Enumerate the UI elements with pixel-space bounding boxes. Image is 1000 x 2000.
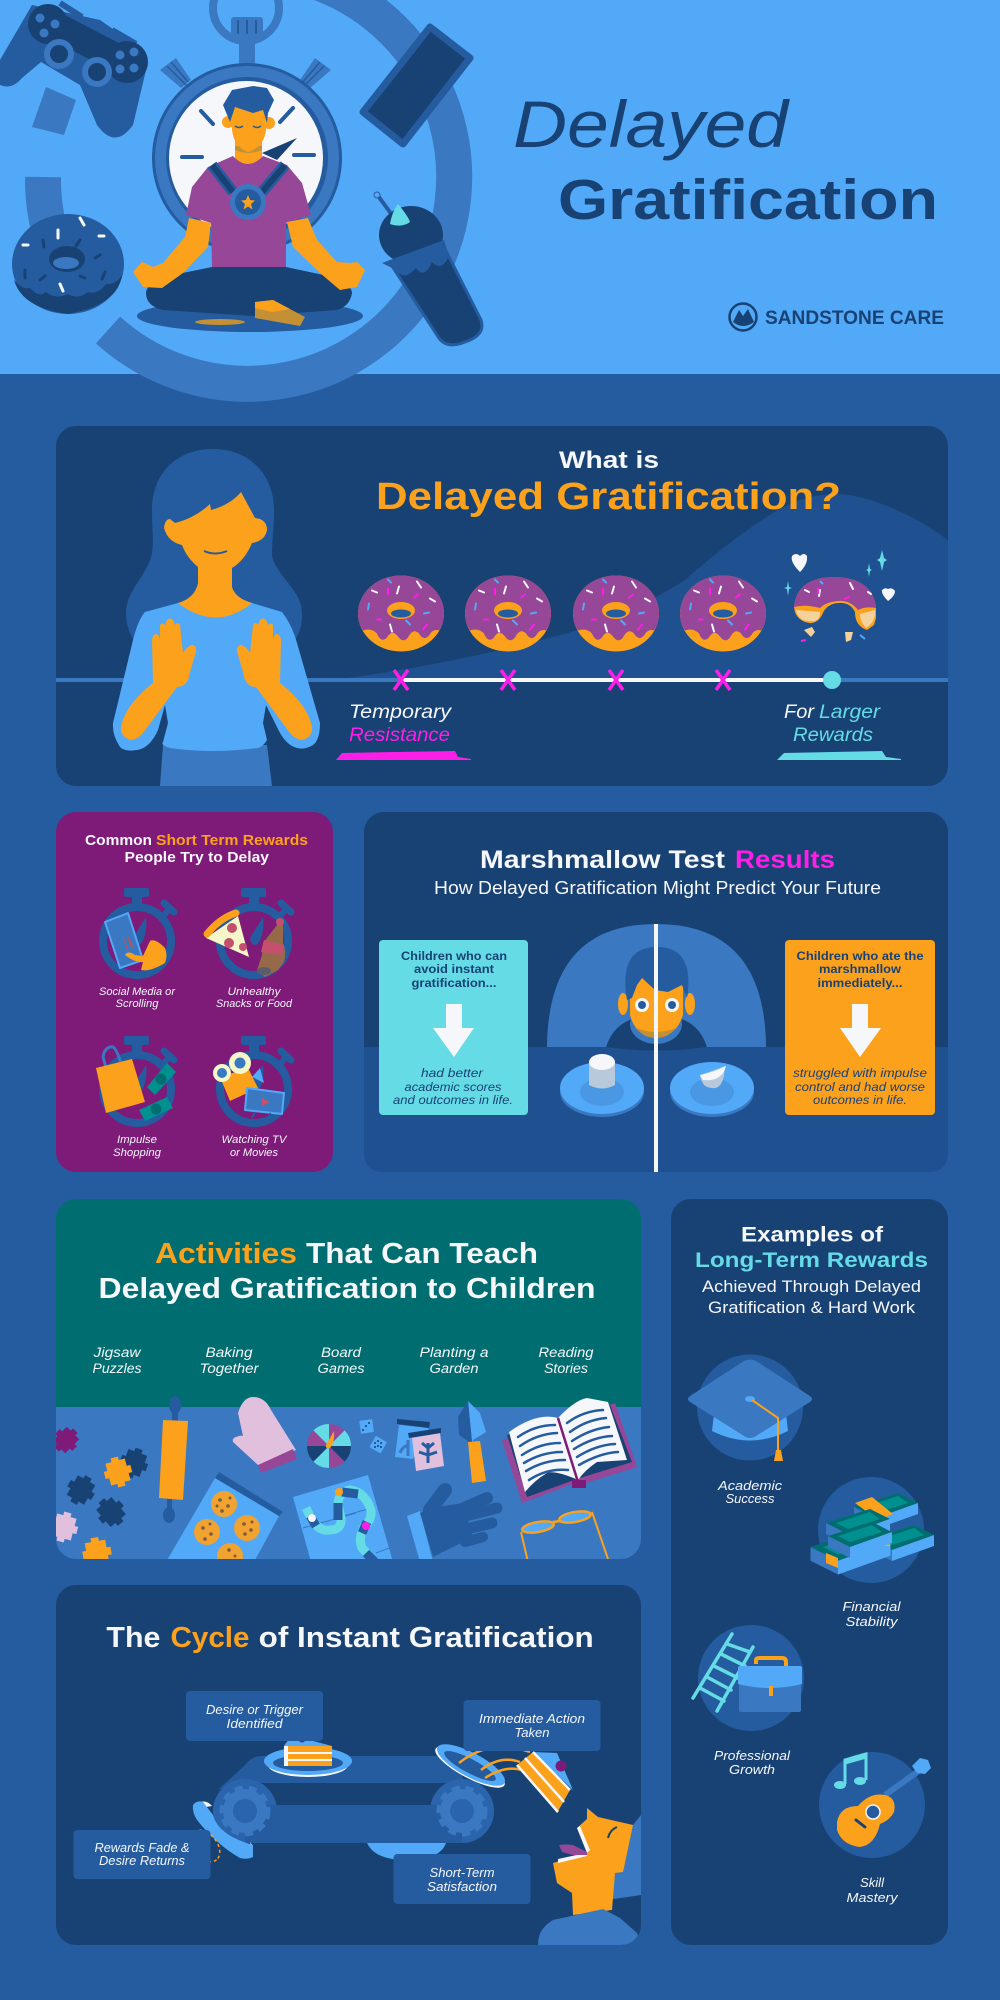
- callout: children who ate: marshmallow: [819, 964, 901, 976]
- heading: activities: Delayed Gratification to Children: [98, 1273, 596, 1305]
- callout: children who ate: struggled with impulse: [793, 1066, 927, 1080]
- callout: desire or trigger: Identified: [226, 1717, 284, 1731]
- callout: rewards fade: Desire Returns: [99, 1854, 185, 1868]
- panel: cycle of instant gratification: [56, 1585, 641, 1945]
- callout: children who ate: immediately...: [818, 978, 902, 990]
- illustration: person eating: [538, 1808, 641, 1945]
- icon: social media: [103, 888, 174, 975]
- labels: activities: Games: [318, 1361, 365, 1376]
- icon: gardening glove: [407, 1490, 497, 1562]
- header band: [0, 0, 1000, 374]
- icon: graduation cap: [688, 1354, 812, 1461]
- heading: short term rewards: [85, 832, 308, 866]
- icon: cake on plate: [264, 1736, 352, 1777]
- labels: long-term rewards: Mastery: [846, 1890, 899, 1905]
- callout: short-term satisfaction: Satisfaction: [427, 1880, 497, 1894]
- callout: short-term satisfaction: Short-Term: [430, 1866, 494, 1880]
- icon: puzzle pieces: [56, 1426, 148, 1559]
- icon: guitar and notes: [819, 1752, 931, 1858]
- illustration: child with marshmallows: [547, 924, 766, 1172]
- heading: cycle: Cycle: [170, 1622, 250, 1654]
- heading: what is: [376, 447, 841, 518]
- logo: Sandstone Care: SANDSTONE CARE: [765, 308, 944, 329]
- callout: short-term satisfaction: [394, 1854, 530, 1904]
- label: temporary resistance: [336, 702, 471, 760]
- callout: children who ate: outcomes in life.: [813, 1093, 907, 1107]
- heading: cycle: of Instant Gratification: [259, 1622, 594, 1654]
- labels: activities: [92, 1345, 594, 1376]
- icon: money stacks: [810, 1477, 934, 1583]
- heading: long-term rewards: [695, 1224, 928, 1317]
- label: for larger rewards: Rewards: [793, 725, 874, 746]
- labels: activities: Jigsaw: [92, 1345, 142, 1360]
- labels: activities: Board: [321, 1345, 362, 1360]
- title: Delayed Gratification: Gratification: [558, 168, 938, 232]
- heading: activities: [98, 1238, 596, 1305]
- heading: marshmallow test results: How Delayed Gratification Might Predict Your Future: [434, 878, 881, 898]
- callout: rewards fade: Rewards Fade &: [94, 1841, 190, 1855]
- icon: oven mitt: [233, 1397, 297, 1473]
- labels: reward types: Scrolling: [116, 998, 159, 1010]
- labels: activities: Reading: [538, 1345, 594, 1360]
- heading: long-term rewards: Examples of: [741, 1224, 884, 1246]
- icon: rolling pin: [159, 1396, 188, 1523]
- icon: tipped plate and flying cake: [430, 1737, 573, 1813]
- callout: children who avoid: Children who can: [401, 951, 507, 963]
- callout: children who avoid: gratification...: [412, 978, 496, 990]
- heading: activities: That Can Teach: [306, 1238, 538, 1270]
- icon: glasses: [521, 1509, 609, 1562]
- heading: long-term rewards: Achieved Through Delayed: [702, 1277, 921, 1296]
- heading: marshmallow test results: [434, 846, 881, 898]
- meditating man: [133, 86, 365, 332]
- heading: marshmallow test results: Marshmallow Test: [480, 846, 726, 874]
- label: for larger rewards: [777, 702, 901, 760]
- heading: cycle: The: [106, 1622, 160, 1654]
- icon: shopping: [96, 1036, 176, 1123]
- logo: Sandstone Care: [730, 304, 944, 330]
- callout: children who avoid: had better: [421, 1066, 484, 1080]
- callout: children who avoid: academic scores: [404, 1080, 502, 1094]
- icon: phone: [363, 27, 470, 144]
- labels: long-term rewards: [714, 1478, 902, 1905]
- icon: slushie cup: [374, 192, 482, 345]
- labels: reward types: [99, 986, 293, 1159]
- labels: activities: Planting a: [420, 1345, 489, 1360]
- icon: pizza and soda: [206, 888, 291, 977]
- label: for larger rewards: For: [784, 702, 815, 723]
- heading: what is: What is: [559, 447, 659, 474]
- icon: open book: [502, 1398, 637, 1503]
- callout: children who ate: control and had worse: [795, 1080, 925, 1094]
- labels: reward types: Snacks or Food: [216, 998, 293, 1010]
- callout: children who avoid: [379, 940, 528, 1115]
- labels: reward types: Shopping: [113, 1147, 162, 1159]
- icon: baking tray with cookies: [168, 1472, 283, 1559]
- heading: short term rewards: People Try to Delay: [124, 849, 270, 866]
- illustration: ring behind stopwatch: [32, 0, 454, 384]
- labels: activities: Stories: [544, 1361, 588, 1376]
- icon: bitten donut with hearts: [784, 550, 895, 642]
- heading: short term rewards: Common: [85, 832, 152, 849]
- icon: seed packets: [395, 1419, 444, 1471]
- icon: game controller: [0, 3, 148, 138]
- callout: children who avoid: avoid instant: [414, 964, 494, 976]
- labels: activities: Baking: [206, 1345, 253, 1360]
- labels: long-term rewards: Academic: [717, 1478, 783, 1493]
- icon: garden trowel: [458, 1401, 486, 1483]
- callout: children who ate: [785, 940, 935, 1115]
- labels: reward types: Social Media or: [99, 986, 176, 998]
- timeline: [394, 670, 841, 690]
- callout: immediate action: [464, 1700, 600, 1751]
- panel: activities: [47, 1199, 641, 1571]
- panel: marshmallow test: [364, 812, 948, 1172]
- icon: movie camera and tv: [213, 1036, 291, 1123]
- labels: long-term rewards: Success: [726, 1491, 775, 1506]
- title: Delayed Gratification: [513, 87, 938, 232]
- callout: rewards fade: [74, 1830, 210, 1879]
- label: temporary resistance: Temporary: [349, 702, 453, 723]
- callout: immediate action: Immediate Action: [479, 1712, 585, 1726]
- icon: donut dark: [12, 214, 124, 314]
- panel: short term rewards: [56, 812, 333, 1172]
- labels: reward types: or Movies: [230, 1147, 278, 1159]
- labels: long-term rewards: Professional: [714, 1748, 791, 1763]
- illustration: woman with raised hands: [113, 449, 320, 786]
- labels: long-term rewards: Skill: [860, 1875, 885, 1890]
- icon: spinner and dice: [307, 1419, 387, 1468]
- illustration: conveyor belt: [213, 1756, 494, 1860]
- callout: immediate action: Taken: [514, 1726, 550, 1740]
- icon: donuts: [358, 576, 766, 652]
- heading: long-term rewards: Long-Term Rewards: [695, 1249, 928, 1272]
- labels: long-term rewards: Growth: [729, 1762, 775, 1777]
- labels: long-term rewards: Financial: [842, 1599, 902, 1614]
- callout: desire or trigger: [186, 1691, 323, 1741]
- labels: activities: Puzzles: [92, 1361, 142, 1376]
- labels: reward types: Watching TV: [222, 1134, 288, 1146]
- icon: stopwatch: [152, 0, 342, 253]
- heading: long-term rewards: Gratification & Hard Work: [708, 1298, 916, 1317]
- icon: board game: [293, 1475, 393, 1563]
- heading: activities: Activities: [155, 1238, 297, 1270]
- label: for larger rewards: Larger: [819, 702, 881, 723]
- icon: ladder and briefcase: [693, 1625, 804, 1731]
- labels: reward types: Impulse: [117, 1134, 157, 1146]
- panel: long-term rewards: [671, 1199, 948, 1945]
- heading: what is: Delayed Gratification?: [376, 476, 841, 518]
- title: Delayed Gratification: Delayed: [513, 87, 791, 161]
- labels: long-term rewards: Stability: [846, 1614, 899, 1629]
- label: temporary resistance: Resistance: [349, 725, 450, 746]
- callout: desire or trigger: Desire or Trigger: [206, 1703, 304, 1717]
- labels: reward types: Unhealthy: [228, 986, 282, 998]
- callout: children who ate: Children who ate the: [796, 951, 924, 963]
- labels: activities: Together: [200, 1361, 259, 1376]
- panel: what is delayed gratification: [56, 426, 948, 786]
- heading: short term rewards: Short Term Rewards: [156, 832, 308, 849]
- callout: children who avoid: and outcomes in life.: [393, 1093, 513, 1107]
- icon: left plate: [184, 1801, 253, 1868]
- labels: activities: Garden: [430, 1361, 478, 1376]
- heading: cycle: [106, 1622, 594, 1654]
- heading: marshmallow test results: Results: [735, 846, 835, 874]
